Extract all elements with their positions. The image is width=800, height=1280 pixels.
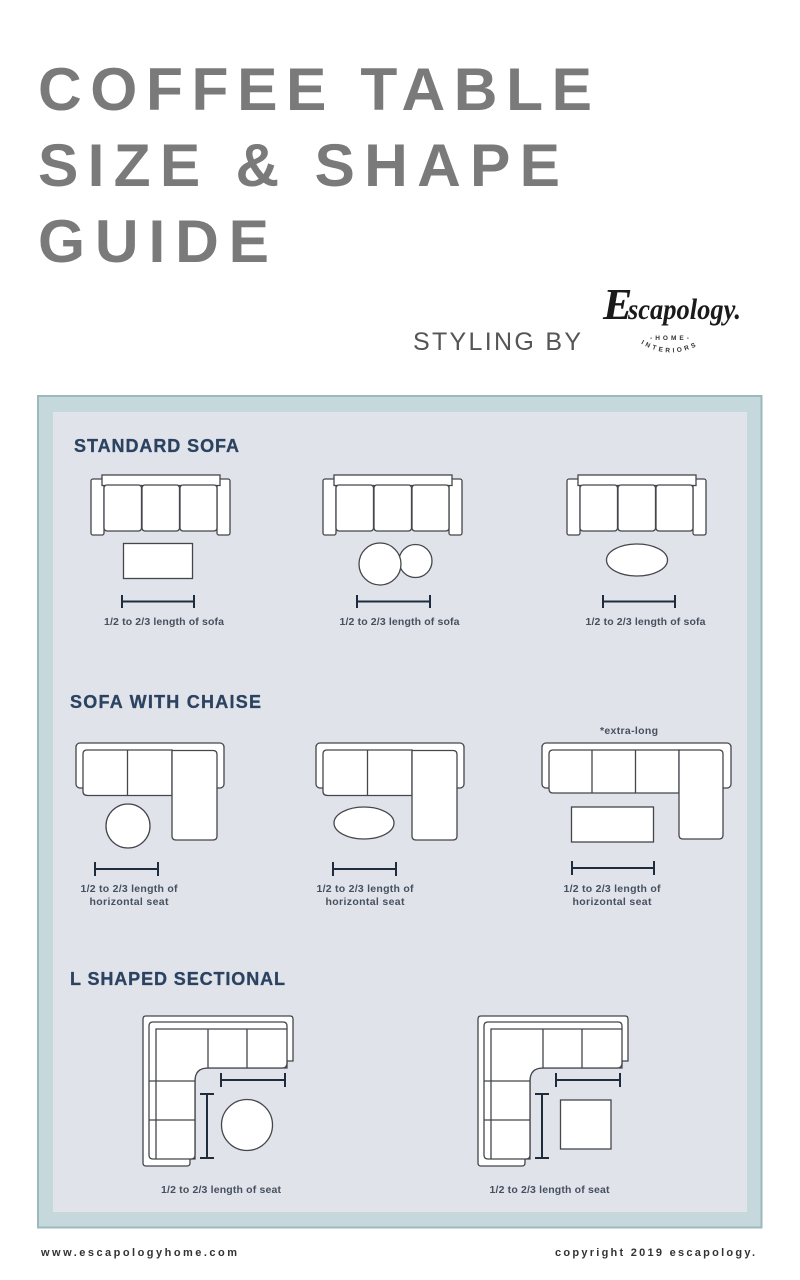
- diagram: extra-long chaise sofa with rectangular table: [542, 725, 731, 908]
- diagram: extra-long chaise sofa with rectangular table: *extra-long: [600, 725, 658, 737]
- panel: guide background: [38, 396, 762, 1228]
- diagram: chaise sofa with round table: [76, 743, 224, 908]
- logo: Escapology Home Interiors: INTERIORS: [641, 340, 696, 352]
- heading: standard sofa: STANDARD SOFA: [74, 436, 239, 456]
- diagram: standard sofa with oval table: 1/2 to 2/3 length of sofa: [586, 616, 706, 628]
- diagram: extra-long chaise sofa with rectangular table: horizontal seat: [572, 896, 652, 908]
- diagram: L sectional with round table: 1/2 to 2/3 length of seat: [161, 1184, 282, 1196]
- diagram: standard sofa with two round tables: [323, 475, 462, 628]
- styling by credit: STYLING BY: [413, 328, 581, 356]
- diagram: chaise sofa with oval table: 1/2 to 2/3 length of: [316, 883, 414, 895]
- diagram: L sectional with round table: [143, 1016, 293, 1196]
- title: GUIDE: [38, 207, 269, 275]
- diagram: standard sofa with rectangular table: [91, 475, 230, 628]
- heading: sofa with chaise: SOFA WITH CHAISE: [70, 692, 261, 712]
- diagram: L sectional with square table: 1/2 to 2/3 length of seat: [490, 1184, 610, 1196]
- diagram: standard sofa with oval table: [567, 475, 706, 628]
- title: SIZE & SHAPE: [38, 131, 560, 199]
- diagram: chaise sofa with round table: 1/2 to 2/3 length of: [80, 883, 178, 895]
- diagram: chaise sofa with oval table: [316, 743, 464, 908]
- diagram: standard sofa with rectangular table: 1/2 to 2/3 length of sofa: [104, 616, 224, 628]
- diagram: chaise sofa with oval table: horizontal seat: [326, 896, 405, 908]
- logo: Escapology Home Interiors: -HOME-: [650, 335, 692, 342]
- footer: copyright: copyright 2019 escapology.: [555, 1247, 755, 1259]
- title: [38, 55, 592, 275]
- diagram: standard sofa with two round tables: 1/2 to 2/3 length of sofa: [340, 616, 460, 628]
- diagram: L sectional with square table: [478, 1016, 628, 1196]
- title: COFFEE TABLE: [38, 55, 592, 123]
- diagram: chaise sofa with round table: horizontal seat: [90, 896, 169, 908]
- logo: Escapology Home Interiors: scapology.: [627, 293, 741, 326]
- heading: L shaped sectional: L SHAPED SECTIONAL: [70, 969, 285, 989]
- logo: Escapology Home Interiors: [602, 280, 741, 352]
- footer: website: www.escapologyhome.com: [40, 1247, 237, 1259]
- diagram: extra-long chaise sofa with rectangular table: 1/2 to 2/3 length of: [564, 883, 661, 895]
- logo: Escapology Home Interiors: E: [602, 280, 632, 329]
